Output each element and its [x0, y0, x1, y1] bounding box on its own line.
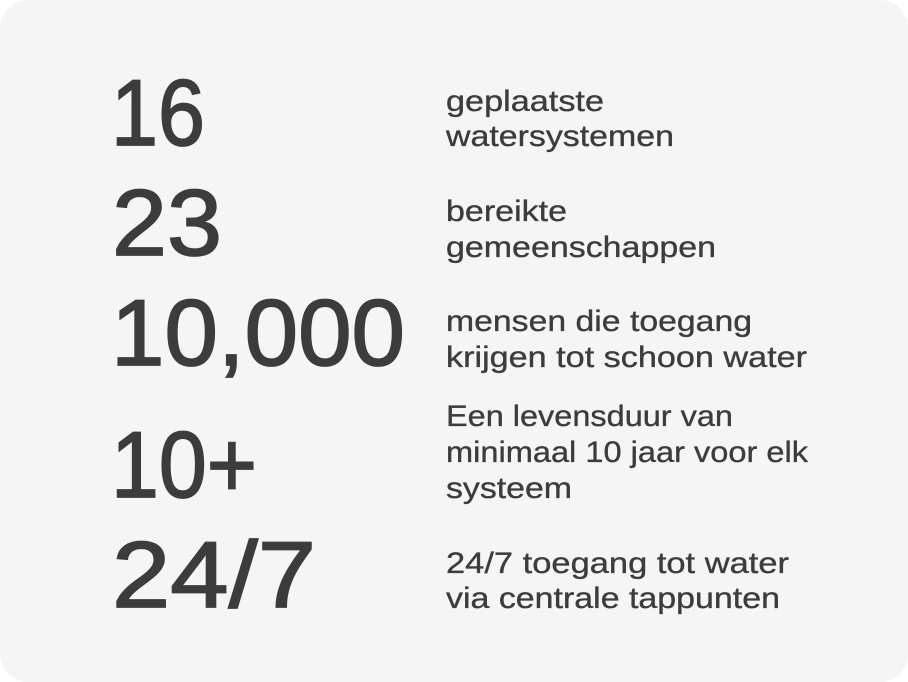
number: 16: 16: [111, 60, 205, 165]
description: communities reached: bereikte: [446, 195, 567, 228]
description: communities reached: gemeenschappen: [446, 231, 716, 264]
description: people with access to clean water: krijgen tot schoon water: [446, 341, 807, 374]
stat row: 16 systems: [111, 60, 674, 165]
description: lifespan of at least 10 years: minimaal 10 jaar voor elk: [446, 436, 809, 469]
number: 24/7: 24/7: [112, 522, 316, 627]
description: people with access to clean water: mensen die toegang: [446, 305, 752, 338]
description: 24/7 access via central taps: 24/7 toegang tot water: [446, 547, 789, 580]
description: 24/7 access via central taps: via centrale tappunten: [446, 582, 780, 615]
description: placed water systems: geplaatste: [446, 85, 604, 118]
stat row: 24/7 access: [112, 522, 789, 627]
number: 23: 23: [112, 170, 222, 275]
stat row: 10,000 people: [111, 280, 807, 385]
description: placed water systems: watersystemen: [445, 120, 674, 153]
number: 10,000: 10,000: [111, 280, 405, 385]
description: lifespan of at least 10 years: systeem: [446, 472, 572, 505]
description: lifespan of at least 10 years: Een levensduur van: [446, 400, 733, 433]
stat row: 23 communities: [112, 170, 716, 275]
number: 10+: 10+: [111, 412, 257, 517]
stat row: 10+ years lifespan: [111, 400, 809, 517]
